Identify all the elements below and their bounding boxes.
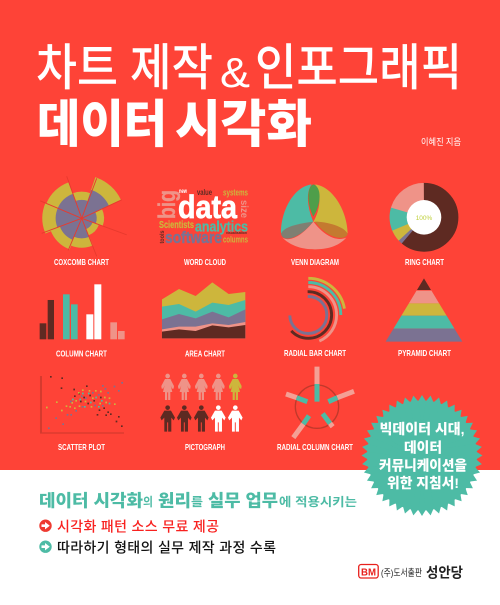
word cloud: systems <box>223 188 248 198</box>
feature text: free source: 시각화 패턴 소스 무료 제공 <box>57 518 219 534</box>
author: 이혜진 지음 <box>421 136 461 147</box>
badge text <box>379 421 467 491</box>
label: ring chart: RING CHART <box>405 257 445 267</box>
scatter plot <box>40 376 124 434</box>
title <box>36 40 462 153</box>
word cloud: size <box>238 200 249 218</box>
word cloud: data <box>178 189 237 225</box>
publisher logo <box>359 564 463 580</box>
title: 시각화 <box>175 96 312 153</box>
footer headline: 데이터 시각화 <box>39 492 143 510</box>
word cloud <box>154 188 249 247</box>
footer headline: 실무 업무 <box>208 492 278 510</box>
bullet icon: red arrow <box>39 520 52 532</box>
publisher logo: 성안당 <box>426 564 463 580</box>
word cloud: value <box>197 188 212 197</box>
title: 데이터 <box>37 96 167 153</box>
pictograph <box>160 374 243 432</box>
title: 인포그래픽 <box>255 40 462 96</box>
word cloud: new <box>179 189 187 195</box>
publisher logo: (주)도서출판 <box>381 568 422 579</box>
label: pictograph: PICTOGRAPH <box>185 442 225 452</box>
feature text: practice process: 따라하기 형태의 실무 제작 과정 수록 <box>57 540 276 556</box>
label: coxcomb chart: COXCOMB CHART <box>54 257 110 267</box>
label: venn diagram: VENN DIAGRAM <box>291 257 339 267</box>
footer headline <box>39 492 357 510</box>
badge text: 빅데이터 시대, <box>380 421 464 437</box>
badge starburst <box>362 395 482 516</box>
label: word cloud: WORD CLOUD <box>184 257 226 267</box>
title: 제작 <box>130 40 213 96</box>
column chart <box>40 284 125 339</box>
badge text: 위한 지침서! <box>387 475 459 491</box>
footer headline: 에 적용시키는 <box>279 494 357 509</box>
footer headline: 를 <box>191 495 203 509</box>
white footer panel <box>0 470 500 605</box>
label: area chart: AREA CHART <box>185 348 226 358</box>
footer headline: 의 <box>143 495 153 509</box>
word cloud: big <box>154 190 181 219</box>
badge <box>362 395 482 516</box>
badge text: 데이터 <box>404 440 442 456</box>
publisher logo: BM <box>361 566 376 578</box>
title: & <box>220 49 250 96</box>
word cloud: software <box>165 228 222 247</box>
ring chart: 100% <box>416 215 433 222</box>
label: radial column chart: RADIAL COLUMN CHART <box>277 442 354 452</box>
word cloud: tools <box>160 230 166 244</box>
radial bar chart <box>272 278 345 352</box>
radial column chart <box>286 367 354 438</box>
badge text: 커뮤니케이션을 <box>379 458 467 474</box>
label: column chart: COLUMN CHART <box>56 348 108 358</box>
bullet icon: teal arrow <box>39 540 52 553</box>
pyramid chart <box>386 278 462 342</box>
title: 차트 <box>36 40 118 96</box>
label: scatter plot: SCATTER PLOT <box>58 442 106 452</box>
coxcomb chart <box>40 176 127 256</box>
word cloud: analytics <box>195 219 248 236</box>
area chart <box>162 282 245 338</box>
word cloud: Scientists <box>159 220 194 231</box>
venn diagram <box>281 184 348 249</box>
red background panel <box>0 0 500 470</box>
word cloud: columns <box>223 235 248 245</box>
footer headline: 원리 <box>158 492 191 510</box>
label: radial bar chart: RADIAL BAR CHART <box>284 348 347 358</box>
word cloud: visualisation <box>226 231 247 235</box>
ring chart <box>400 193 448 242</box>
label: pyramid chart: PYRAMID CHART <box>398 348 452 358</box>
